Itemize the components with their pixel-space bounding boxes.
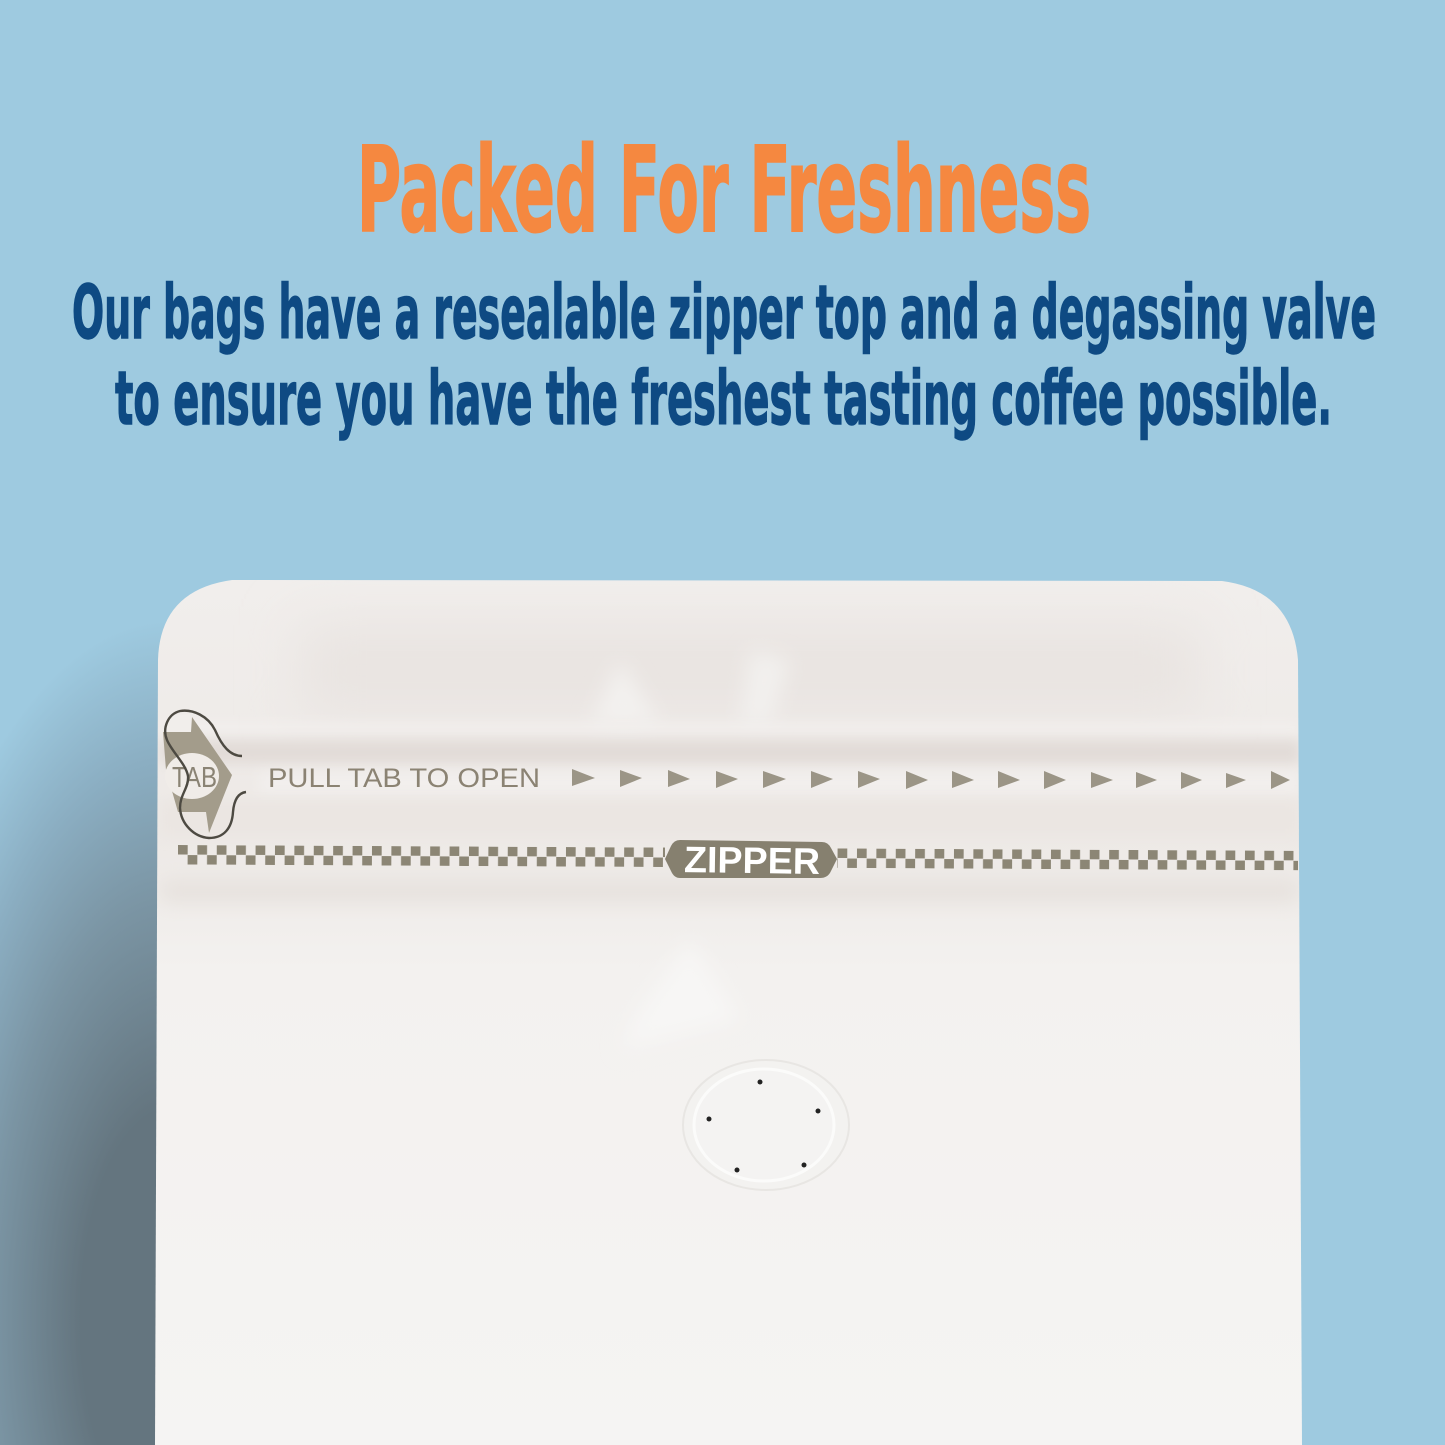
direction arrows (572, 769, 1290, 789)
pull tab logo (163, 711, 246, 838)
zipper track (178, 845, 1298, 870)
pull tab logo: TAB (172, 762, 217, 794)
bag shadow (0, 600, 165, 1445)
coffee bag (155, 580, 1302, 1445)
pull tab to open label: PULL TAB TO OPEN (268, 763, 540, 793)
bag creases (160, 640, 1299, 900)
zipper badge: ZIPPER (684, 839, 820, 882)
degassing valve (683, 1060, 849, 1190)
description (72, 270, 1376, 442)
